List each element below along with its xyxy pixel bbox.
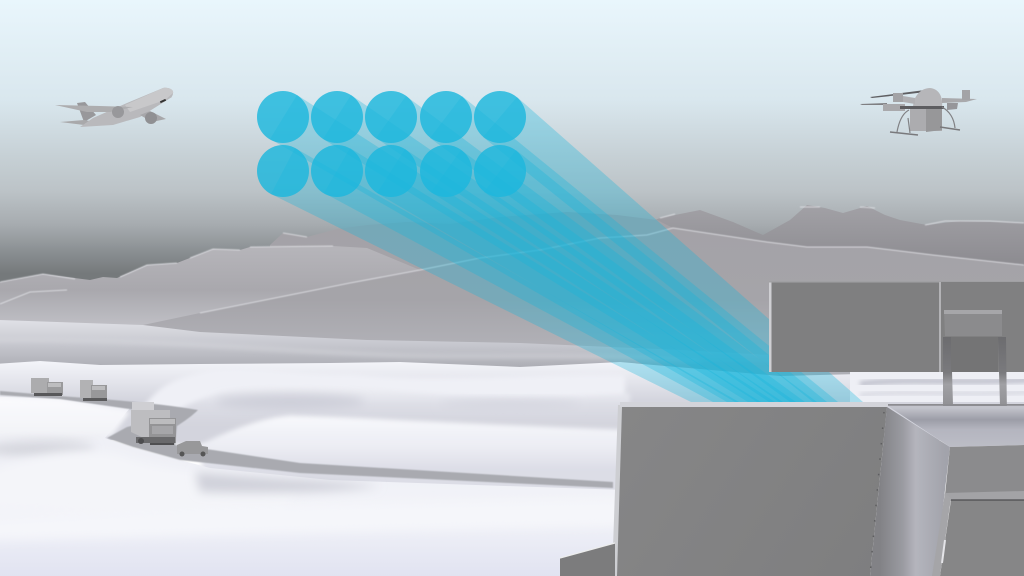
trucks [31, 378, 208, 456]
bunker [560, 402, 1024, 576]
sensor panel [769, 281, 1024, 417]
laser beams [270, 95, 863, 402]
road [0, 391, 613, 488]
truck 1 [31, 378, 63, 396]
snow ridge lines [0, 207, 1024, 313]
drone [860, 88, 977, 135]
airplane [55, 88, 173, 127]
terrain: snow fields [0, 320, 1024, 576]
circle array [257, 91, 526, 197]
truck 3 [131, 402, 176, 445]
sky [0, 0, 1024, 300]
bracket [943, 310, 1007, 417]
pickup [177, 441, 208, 456]
terrain: far mountains [0, 205, 1024, 365]
truck 2 [80, 380, 107, 401]
